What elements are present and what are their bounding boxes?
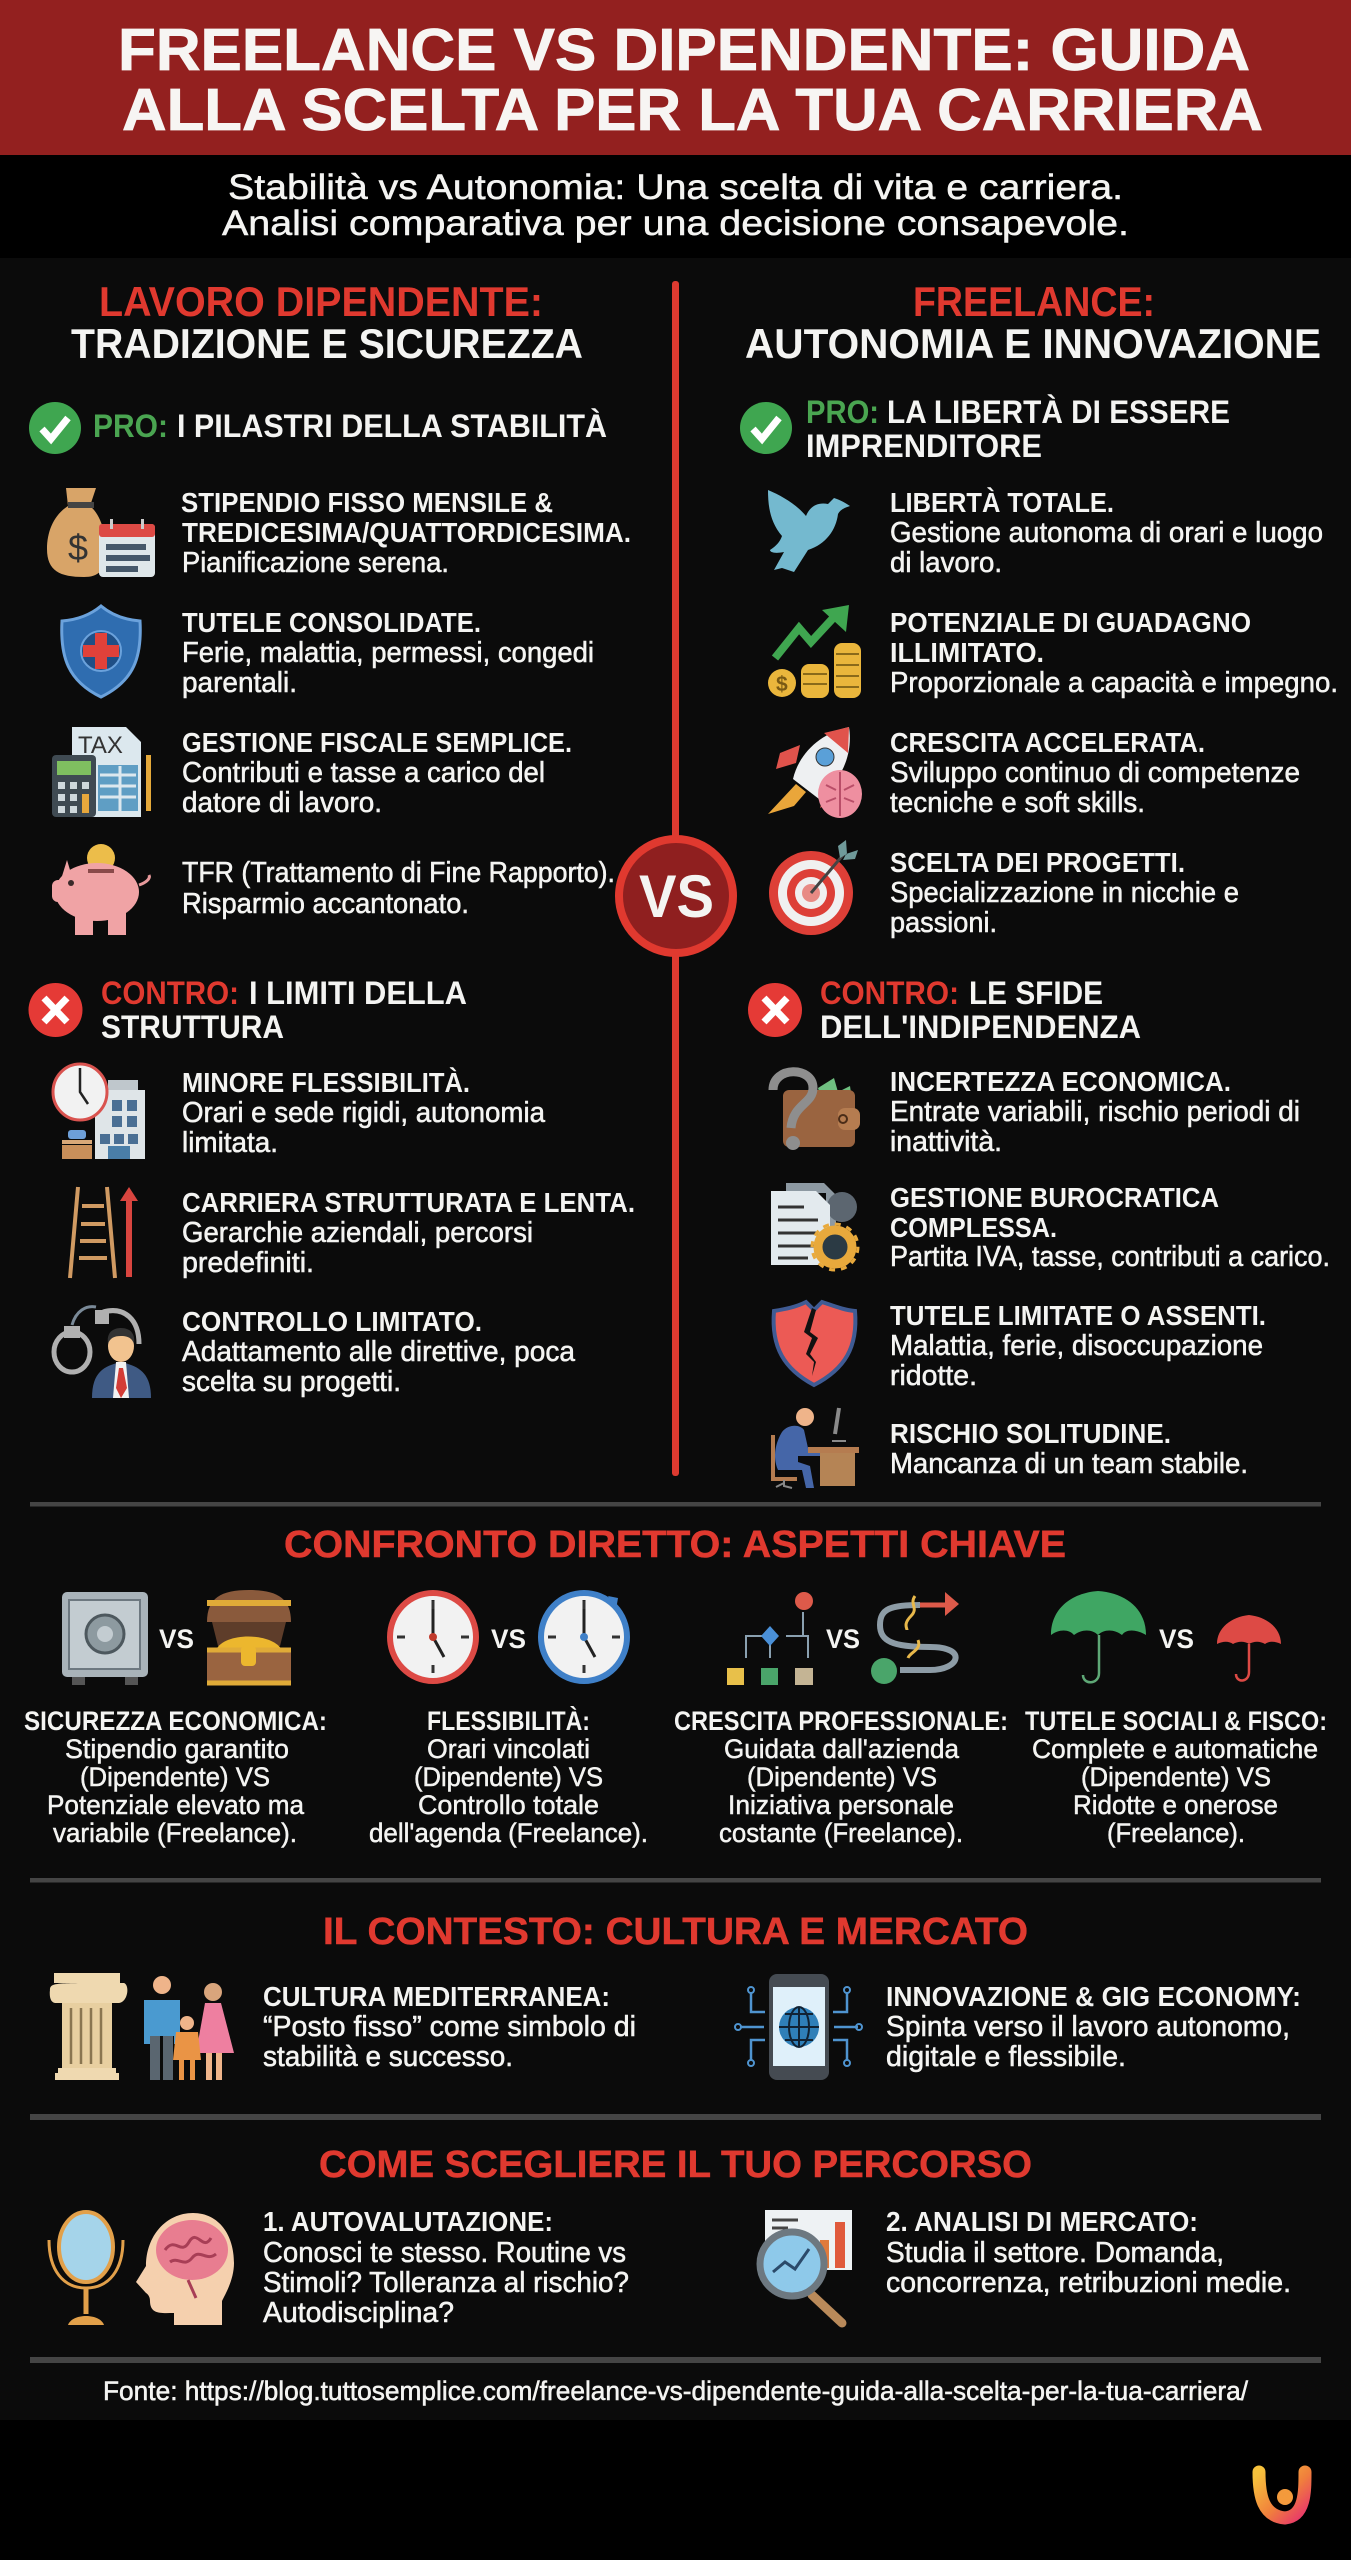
text: tfr bbox=[182, 857, 615, 920]
text: cultura mediterranea: CULTURA MEDITERRANEA: bbox=[263, 1981, 610, 2012]
text: carriera strutturata bbox=[182, 1187, 635, 1279]
icon: tax document and calculator bbox=[52, 727, 151, 817]
text: minore flessibilità: Orari e sede rigidi, autonomia bbox=[182, 1097, 545, 1129]
contro heading: sfide dell'indipendenza: LE SFIDE bbox=[969, 975, 1103, 1011]
text: controllo limitato: scelta su progetti. bbox=[182, 1366, 401, 1398]
heading: lavoro dipendente bbox=[71, 278, 583, 367]
item: rischio solitudine bbox=[773, 1408, 1248, 1488]
text: crescita professionale: costante (Freelance). bbox=[719, 1818, 963, 1848]
text: gestione burocratica: COMPLESSA. bbox=[890, 1212, 1057, 1243]
icon: money bag and calendar bbox=[47, 488, 155, 577]
icon: rocket and brain bbox=[768, 727, 862, 818]
heading: il contesto: IL CONTESTO: CULTURA E MERCATO bbox=[323, 1911, 1028, 1953]
source footer: Fonte: https://blog.tuttosemplice.com/freelance-vs-dipendente-guida-alla-scelta-per-la-tua-carriera/ bbox=[103, 2376, 1248, 2406]
text: tutele consolidate: TUTELE CONSOLIDATE. bbox=[182, 607, 481, 638]
subtitle: Analisi comparativa per una decisione consapevole. bbox=[222, 203, 1129, 243]
text: rischio solitudine: RISCHIO SOLITUDINE. bbox=[890, 1418, 1171, 1449]
pro heading: pilastri della stabilità: I PILASTRI DELLA STABILITÀ bbox=[177, 408, 607, 444]
text: crescita professionale: CRESCITA PROFESSIONALE: bbox=[674, 1706, 1008, 1736]
pro heading: libertà di essere imprenditore: LA LIBERTÀ DI ESSERE bbox=[887, 394, 1230, 430]
text: incertezza economica bbox=[890, 1066, 1300, 1158]
text: controllo limitato: Adattamento alle direttive, poca bbox=[182, 1336, 575, 1368]
text: flessibilità bbox=[369, 1705, 648, 1848]
item: libertà totale bbox=[768, 487, 1323, 579]
icon: documents and gear bbox=[771, 1183, 858, 1270]
comparison: crescita professionale bbox=[674, 1592, 1008, 1848]
text: potenziale di guadagno: POTENZIALE DI GUADAGNO bbox=[890, 607, 1251, 638]
text: autovalutazione: Autodisciplina? bbox=[263, 2297, 454, 2329]
text: libertà totale bbox=[890, 487, 1323, 579]
text: cultura mediterranea: stabilità e successo. bbox=[263, 2041, 513, 2073]
contro heading: sfide dell'indipendenza: CONTRO: bbox=[820, 975, 959, 1011]
heading: freelance: AUTONOMIA E INNOVAZIONE bbox=[745, 320, 1321, 367]
item: controllo limitato bbox=[54, 1306, 575, 1398]
item: gestione burocratica bbox=[771, 1182, 1330, 1273]
item: potenziale di guadagno bbox=[768, 605, 1338, 699]
text: minore flessibilità: limitata. bbox=[182, 1127, 278, 1159]
text: crescita accelerata: CRESCITA ACCELERATA. bbox=[890, 727, 1205, 758]
text: scelta dei progetti bbox=[890, 847, 1239, 939]
icon: handcuffs and employee bbox=[54, 1307, 151, 1398]
text: tutele consolidate: Ferie, malattia, permessi, congedi bbox=[182, 637, 594, 669]
text: analisi di mercato: concorrenza, retribuzioni medie. bbox=[886, 2267, 1291, 2299]
text: gestione burocratica: Partita IVA, tasse, contributi a carico. bbox=[890, 1241, 1330, 1273]
text: stipendio fisso bbox=[181, 487, 631, 579]
text: libertà totale: LIBERTÀ TOTALE. bbox=[890, 487, 1114, 518]
text: innovazione e gig economy: Spinta verso il lavoro autonomo, bbox=[886, 2011, 1290, 2043]
item: incertezza economica bbox=[773, 1066, 1300, 1158]
text: stipendio fisso: Pianificazione serena. bbox=[182, 547, 449, 579]
item: cultura mediterranea bbox=[50, 1973, 636, 2080]
text: stipendio fisso: TREDICESIMA/QUATTORDICESIMA. bbox=[182, 517, 631, 548]
item: stipendio fisso bbox=[47, 487, 631, 579]
text: sicurezza economica: SICUREZZA ECONOMICA: bbox=[24, 1706, 327, 1736]
text: controllo limitato bbox=[182, 1306, 575, 1398]
text: tutele sociali e fisco: (Dipendente) VS bbox=[1081, 1762, 1271, 1792]
text: crescita professionale: Guidata dall'azienda bbox=[724, 1734, 960, 1764]
text: autovalutazione bbox=[263, 2206, 629, 2329]
icon: smartphone with globe bbox=[735, 1974, 862, 2080]
icon: target and arrow bbox=[769, 840, 858, 935]
central divider line bbox=[672, 281, 679, 1476]
text: scelta dei progetti: SCELTA DEI PROGETTI. bbox=[890, 847, 1185, 878]
text: tutele limitate bbox=[890, 1300, 1266, 1392]
text: stipendio fisso: STIPENDIO FISSO MENSILE & bbox=[181, 487, 553, 518]
item: tutele limitate bbox=[774, 1300, 1266, 1392]
text: crescita professionale: (Dipendente) VS bbox=[747, 1762, 937, 1792]
text: crescita accelerata bbox=[890, 727, 1300, 819]
heading: confronto diretto: CONFRONTO DIRETTO: ASPETTI CHIAVE bbox=[284, 1524, 1066, 1566]
comparison: sicurezza economica bbox=[24, 1590, 327, 1848]
item: autovalutazione bbox=[49, 2206, 629, 2329]
icon: tax document and calculator: TAX bbox=[78, 732, 123, 759]
text: autovalutazione: 1. AUTOVALUTAZIONE: bbox=[263, 2206, 553, 2237]
icon: piggy bank bbox=[52, 844, 149, 935]
icon: safe vs treasure chest bbox=[62, 1590, 291, 1685]
icon: two clocks bbox=[390, 1593, 627, 1681]
text: analisi di mercato bbox=[886, 2206, 1291, 2299]
text: innovazione e gig economy: INNOVAZIONE & GIG ECONOMY: bbox=[886, 1981, 1301, 2012]
text: rischio solitudine: Mancanza di un team stabile. bbox=[890, 1448, 1248, 1480]
icon: org flow vs winding path: VS bbox=[826, 1624, 860, 1654]
text: potenziale di guadagno: ILLIMITATO. bbox=[890, 637, 1044, 668]
text: crescita accelerata: Sviluppo continuo di competenze bbox=[890, 757, 1300, 789]
text: analisi di mercato: Studia il settore. Domanda, bbox=[886, 2237, 1224, 2269]
header banner with title: FREELANCE VS DIPENDENTE: GUIDA bbox=[118, 17, 1250, 83]
text: sicurezza economica bbox=[24, 1706, 327, 1848]
icon: chart and magnifying glass bbox=[760, 2210, 852, 2323]
icon: shield with cross bbox=[62, 606, 140, 697]
contro heading: limiti della struttura: STRUTTURA bbox=[101, 1009, 284, 1045]
icon: ladder and arrow bbox=[70, 1187, 138, 1278]
logo bbox=[1259, 2472, 1305, 2518]
text: gestione fiscale: Contributi e tasse a carico del bbox=[182, 757, 545, 789]
text: autovalutazione: Stimoli? Tolleranza al rischio? bbox=[263, 2267, 629, 2299]
icon: safe vs treasure chest: VS bbox=[159, 1624, 194, 1654]
text: innovazione e gig economy bbox=[886, 1981, 1301, 2073]
text: incertezza economica: Entrate variabili, rischio periodi di bbox=[890, 1096, 1300, 1128]
contro heading: limiti della struttura bbox=[28, 975, 467, 1045]
item: innovazione e gig economy bbox=[735, 1974, 1301, 2080]
item: scelta dei progetti bbox=[769, 840, 1239, 939]
text: tutele limitate: TUTELE LIMITATE O ASSENTI. bbox=[890, 1300, 1266, 1331]
item: tutele consolidate bbox=[62, 606, 594, 699]
text: libertà totale: di lavoro. bbox=[890, 547, 1002, 579]
icon: clock and office bbox=[53, 1064, 145, 1159]
item: crescita accelerata bbox=[768, 727, 1300, 819]
text: tutele sociali e fisco: (Freelance). bbox=[1107, 1818, 1245, 1848]
icon: mirror and head with brain bbox=[49, 2212, 234, 2325]
text: carriera strutturata: predefiniti. bbox=[182, 1247, 314, 1279]
text: carriera strutturata: Gerarchie aziendali, percorsi bbox=[182, 1217, 533, 1249]
text: tfr: TFR (Trattamento di Fine Rapporto). bbox=[182, 857, 615, 889]
text: crescita professionale bbox=[674, 1706, 1008, 1848]
subtitle: Stabilità vs Autonomia: Una scelta di vita e carriera. bbox=[228, 167, 1123, 207]
text: flessibilità: Orari vincolati bbox=[427, 1734, 590, 1764]
text: controllo limitato: CONTROLLO LIMITATO. bbox=[182, 1306, 482, 1337]
text: rischio solitudine bbox=[890, 1418, 1248, 1480]
text: flessibilità: Controllo totale bbox=[418, 1790, 599, 1820]
panel: lavoro dipendente bbox=[28, 278, 635, 1398]
pro heading: libertà di essere imprenditore: IMPRENDITORE bbox=[806, 428, 1042, 464]
icon: broken shield bbox=[774, 1302, 855, 1385]
text: tfr: Risparmio accantonato. bbox=[182, 888, 469, 920]
panel: freelance bbox=[740, 278, 1338, 1488]
text: sicurezza economica: (Dipendente) VS bbox=[80, 1762, 270, 1792]
panel: come scegliere bbox=[49, 2144, 1291, 2329]
icon: wallet and question mark bbox=[773, 1072, 860, 1150]
text: minore flessibilità bbox=[182, 1067, 545, 1159]
item: gestione fiscale bbox=[52, 727, 572, 819]
text: potenziale di guadagno bbox=[890, 607, 1338, 699]
item: tfr bbox=[52, 844, 615, 935]
pro heading: libertà di essere imprenditore bbox=[740, 394, 1230, 464]
text: autovalutazione: Conosci te stesso. Routine vs bbox=[263, 2237, 626, 2269]
text: sicurezza economica: Potenziale elevato ma bbox=[47, 1790, 305, 1820]
text: libertà totale: Gestione autonoma di orari e luogo bbox=[890, 517, 1323, 549]
item: carriera strutturata bbox=[70, 1187, 635, 1279]
icon: big umbrella vs small umbrella: VS bbox=[1159, 1624, 1194, 1654]
comparison: tutele sociali e fisco bbox=[1025, 1591, 1327, 1848]
pro heading: pilastri della stabilità: PRO: bbox=[93, 408, 168, 444]
text: gestione burocratica bbox=[890, 1182, 1330, 1273]
text: gestione fiscale: GESTIONE FISCALE SEMPLICE. bbox=[182, 727, 572, 758]
panel: confronto diretto bbox=[24, 1524, 1327, 1848]
pro heading: libertà di essere imprenditore: PRO: bbox=[806, 394, 879, 430]
text: gestione burocratica: GESTIONE BUROCRATICA bbox=[890, 1182, 1219, 1213]
panel: il contesto bbox=[50, 1911, 1301, 2080]
text: incertezza economica: INCERTEZZA ECONOMICA. bbox=[890, 1066, 1231, 1097]
heading: lavoro dipendente: LAVORO DIPENDENTE: bbox=[99, 278, 543, 325]
text: tutele limitate: Malattia, ferie, disoccupazione bbox=[890, 1330, 1263, 1362]
text: flessibilità: dell'agenda (Freelance). bbox=[369, 1818, 648, 1848]
subtitle bbox=[222, 167, 1129, 243]
contro heading: sfide dell'indipendenza: DELL'INDIPENDENZA bbox=[820, 1009, 1141, 1045]
heading: freelance: FREELANCE: bbox=[913, 278, 1155, 325]
text: crescita accelerata: tecniche e soft skills. bbox=[890, 787, 1145, 819]
icon: money bag and calendar: $ bbox=[68, 527, 88, 568]
text: tutele limitate: ridotte. bbox=[890, 1360, 977, 1392]
contro heading: limiti della struttura: CONTRO: bbox=[101, 975, 239, 1011]
text: tutele consolidate: parentali. bbox=[182, 667, 297, 699]
item: analisi di mercato bbox=[760, 2206, 1291, 2323]
text: minore flessibilità: MINORE FLESSIBILITÀ. bbox=[182, 1067, 470, 1098]
heading: come scegliere: COME SCEGLIERE IL TUO PERCORSO bbox=[319, 2144, 1032, 2186]
icon: column and family bbox=[50, 1973, 234, 2080]
text: innovazione e gig economy: digitale e flessibile. bbox=[886, 2041, 1126, 2073]
text: gestione fiscale bbox=[182, 727, 572, 819]
icon: org flow vs winding path bbox=[727, 1592, 959, 1685]
icon: two clocks: VS bbox=[491, 1624, 526, 1654]
text: sicurezza economica: Stipendio garantito bbox=[65, 1734, 289, 1764]
heading: lavoro dipendente: TRADIZIONE E SICUREZZA bbox=[71, 320, 583, 367]
header banner with title bbox=[0, 0, 1351, 155]
text: scelta dei progetti: Specializzazione in nicchie e bbox=[890, 877, 1239, 909]
contro heading: sfide dell'indipendenza bbox=[748, 975, 1141, 1045]
text: flessibilità: (Dipendente) VS bbox=[414, 1762, 603, 1792]
comparison: flessibilità bbox=[369, 1593, 648, 1848]
VS badge bbox=[619, 839, 733, 953]
text: tutele consolidate bbox=[182, 607, 594, 699]
text: carriera strutturata: CARRIERA STRUTTURATA E LENTA. bbox=[182, 1187, 635, 1218]
VS badge: VS bbox=[639, 863, 714, 930]
text: tutele sociali e fisco bbox=[1025, 1706, 1327, 1848]
text: crescita professionale: Iniziativa personale bbox=[728, 1790, 954, 1820]
text: sicurezza economica: variabile (Freelance). bbox=[53, 1818, 297, 1848]
text: scelta dei progetti: passioni. bbox=[890, 907, 997, 939]
header banner with title: ALLA SCELTA PER LA TUA CARRIERA bbox=[122, 77, 1263, 143]
pro heading: pilastri della stabilità bbox=[29, 402, 607, 454]
text: cultura mediterranea: “Posto fisso” come simbolo di bbox=[263, 2011, 636, 2043]
text: potenziale di guadagno: Proporzionale a capacità e impegno. bbox=[890, 667, 1338, 699]
text: tutele sociali e fisco: Ridotte e onerose bbox=[1073, 1790, 1278, 1820]
item: minore flessibilità bbox=[53, 1064, 545, 1159]
icon: person alone at desk bbox=[773, 1408, 859, 1488]
text: flessibilità: FLESSIBILITÀ: bbox=[427, 1705, 590, 1736]
icon: big umbrella vs small umbrella bbox=[1051, 1591, 1281, 1682]
text: gestione fiscale: datore di lavoro. bbox=[182, 787, 382, 819]
text: incertezza economica: inattività. bbox=[890, 1126, 1002, 1158]
icon: blue bird bbox=[768, 490, 850, 572]
heading: freelance bbox=[745, 278, 1321, 367]
text: analisi di mercato: 2. ANALISI DI MERCATO: bbox=[886, 2206, 1198, 2237]
contro heading: limiti della struttura: I LIMITI DELLA bbox=[249, 975, 467, 1011]
text: tutele sociali e fisco: Complete e automatiche bbox=[1032, 1734, 1318, 1764]
icon: growth arrow and coins: $ bbox=[776, 673, 788, 696]
text: cultura mediterranea bbox=[263, 1981, 636, 2073]
icon: growth arrow and coins bbox=[768, 605, 861, 698]
